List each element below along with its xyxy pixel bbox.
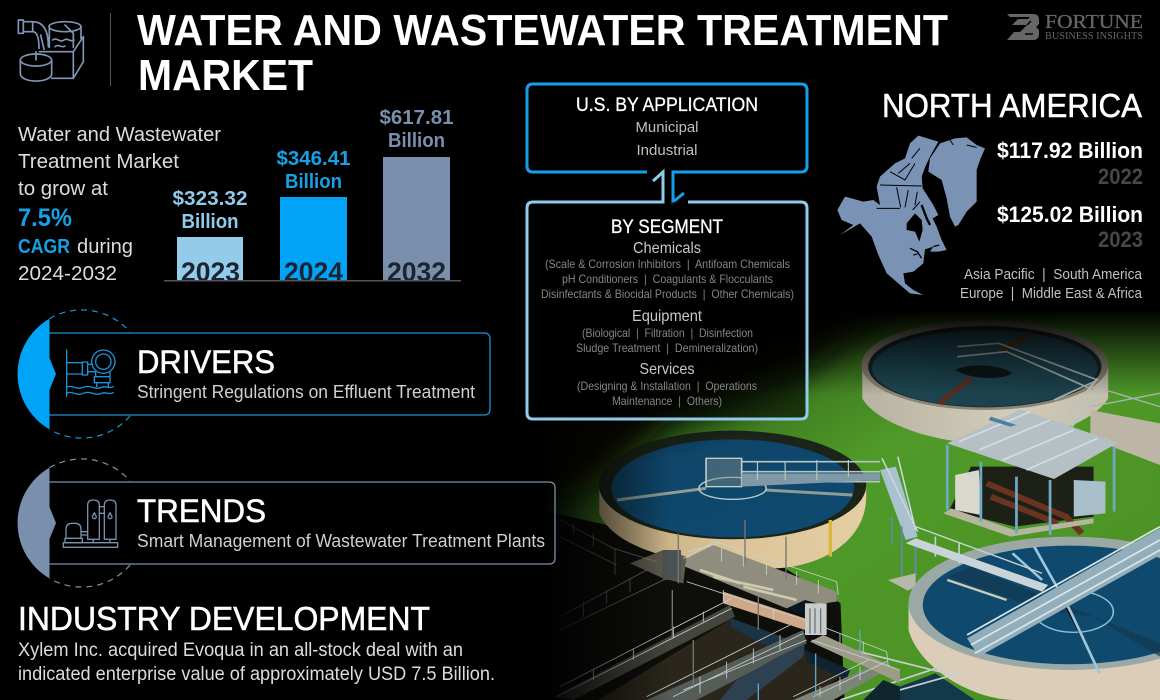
- divider under title icon: [110, 13, 111, 86]
- growth summary text: 7.5%: [18, 204, 72, 232]
- panel: by segment: BY SEGMENT: [611, 217, 723, 238]
- bar 2023: $323.32: [172, 188, 248, 210]
- icon: filtration equipment: [63, 500, 118, 547]
- title: MARKET: [138, 51, 313, 100]
- panel: by segment: (Biological | Filtration | Disinfection: [582, 326, 753, 340]
- north america stats: $117.92 Billion: [997, 138, 1143, 163]
- growth summary text: 2024-2032: [18, 263, 117, 285]
- industry development: Xylem Inc. acquired Evoqua in an all-stock deal with an: [18, 640, 463, 661]
- industry development: [18, 600, 495, 685]
- bar 2032: [380, 107, 454, 287]
- panel: by segment: pH Conditioners | Coagulants & Flocculants: [562, 272, 773, 286]
- bar 2024: Billion: [285, 171, 342, 193]
- panel: U.S. by application: U.S. BY APPLICATION: [576, 95, 758, 116]
- panel: by segment: Sludge Treatment | Demineralization): [576, 341, 758, 355]
- panel: by segment: [527, 172, 807, 419]
- left tank: [599, 485, 866, 568]
- top tank: [862, 365, 1108, 443]
- logo: Fortune Business Insights: BUSINESS INSIGHTS: [1045, 31, 1143, 42]
- panel: U.S. by application: Municipal: [636, 119, 698, 136]
- right tank: [909, 603, 1160, 700]
- growth summary text: Treatment Market: [18, 151, 179, 173]
- photo: wastewater treatment plant: [552, 314, 1160, 700]
- north america stats: Asia Pacific | South America: [964, 267, 1143, 283]
- bar chart: market size: [164, 107, 461, 287]
- north america stats: 2023: [1098, 227, 1143, 252]
- bar 2024: [276, 148, 350, 287]
- title: [137, 6, 948, 100]
- drivers text: Stringent Regulations on Effluent Treatment: [137, 382, 475, 402]
- shelter: [949, 467, 1094, 527]
- growth summary text: to grow at: [18, 178, 108, 200]
- north america stats: 2022: [1098, 164, 1143, 189]
- panel: by segment: (Scale & Corrosion Inhibitors | Antifoam Chemicals: [545, 257, 790, 271]
- panel: by segment: Services: [640, 361, 694, 378]
- north america stats: $125.02 Billion: [997, 202, 1143, 227]
- growth summary text: [18, 124, 221, 285]
- panel: drivers: [18, 310, 490, 438]
- title: WATER AND WASTEWATER TREATMENT: [137, 6, 948, 55]
- stairs: [880, 467, 918, 540]
- bar 2032: 2032: [387, 257, 446, 287]
- icon: water treatment tanks: [18, 20, 83, 81]
- logo: Fortune Business Insights: [1007, 11, 1143, 42]
- panel: by segment: (Designing & Installation | Operations: [577, 379, 757, 393]
- north america stats: Europe | Middle East & Africa: [960, 286, 1143, 302]
- growth summary text: during: [77, 236, 133, 258]
- panel: by segment: Equipment: [632, 308, 703, 325]
- drivers heading: DRIVERS: [137, 344, 275, 380]
- bar 2023: [172, 188, 248, 287]
- logo: Fortune Business Insights: FORTUNE: [1045, 11, 1143, 33]
- north america stats: [882, 87, 1143, 302]
- panel: by segment: Disinfectants & Biocidal Products | Other Chemicals): [541, 287, 794, 301]
- lower-left platforms, rails and basins: [553, 520, 900, 700]
- growth summary text: CAGR: [18, 236, 70, 258]
- bar 2032: $617.81: [380, 107, 454, 129]
- north america stats: NORTH AMERICA: [882, 87, 1142, 124]
- growth summary text: Water and Wastewater: [18, 124, 221, 146]
- trends text: Smart Management of Wastewater Treatment Plants: [137, 531, 545, 551]
- bar 2024: $346.41: [276, 148, 350, 170]
- industry development: indicated enterprise value of approximately USD 7.5 Billion.: [18, 664, 495, 685]
- panel: U.S. by application: [527, 84, 807, 202]
- bar 2023: Billion: [182, 211, 238, 233]
- industry development: INDUSTRY DEVELOPMENT: [18, 600, 430, 637]
- panel: trends: [18, 459, 555, 587]
- bar 2032: Billion: [388, 130, 445, 152]
- trends heading: TRENDS: [137, 493, 266, 529]
- icon: pipe and water meter: [67, 350, 115, 397]
- bar 2023: 2023: [181, 257, 240, 287]
- lower right walkways and basin: [900, 673, 975, 700]
- panel: by segment: Chemicals: [633, 240, 701, 257]
- bar 2024: 2024: [284, 257, 343, 287]
- map: North America: [837, 136, 985, 295]
- panel: by segment: Maintenance | Others): [612, 394, 722, 408]
- panel: U.S. by application: Industrial: [636, 142, 698, 159]
